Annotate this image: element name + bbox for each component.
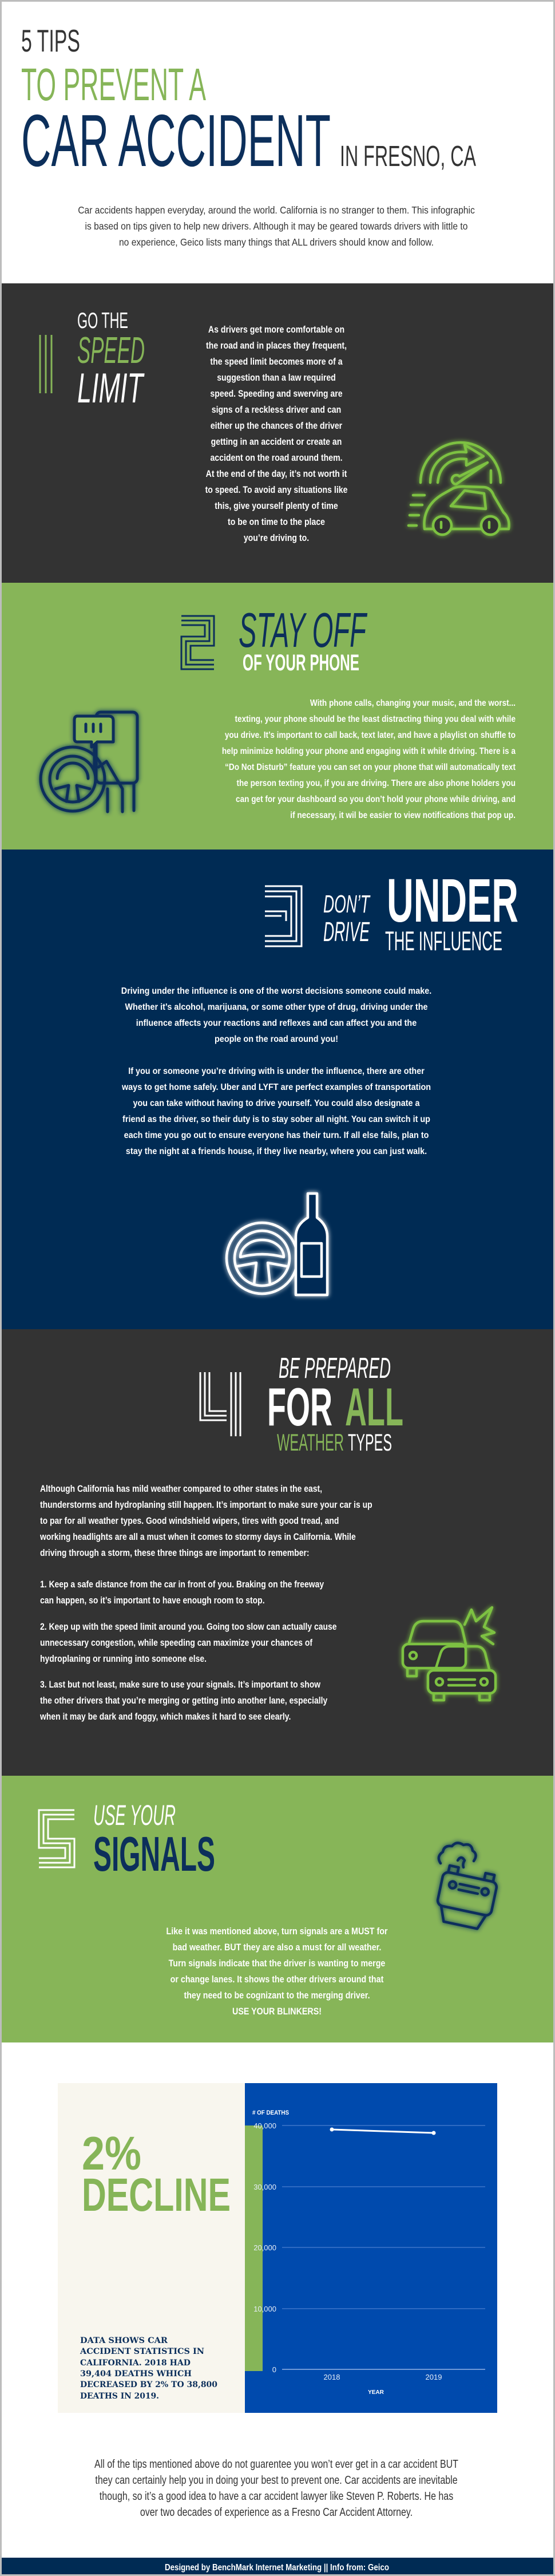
text: weather body: 2. Keep up with the speed limit around you. Going too slow can actually cause [40, 1622, 337, 1632]
text: weather body: when it may be dark and foggy, which makes it hard to see clearly. [39, 1712, 291, 1722]
panel: decline stat: 39,404 DEATHS WHICH [80, 2369, 192, 2379]
text: speed limit body: At the end of the day, it’s not worth it [206, 469, 347, 479]
text: phone body: can get for your dashboard so you don’t hold your phone while driving, and [236, 795, 516, 804]
header [21, 23, 476, 248]
text: signals body: USE YOUR BLINKERS! [232, 2006, 322, 2017]
text: weather body: Although California has mild weather compared to other states in the east, [40, 1484, 322, 1494]
text: weather body [39, 1484, 372, 1722]
heading: don't drive under the influence: DON’T [323, 890, 371, 918]
text: signals body: bad weather. BUT they are also a must for all weather. [173, 1942, 381, 1953]
text: influence body: people on the road around you! [215, 1034, 338, 1044]
text: weather body: unnecessary congestion, while speeding can maximize your chances of [40, 1638, 313, 1648]
footer: Designed by BenchMark Internet Marketing || Info from: Geico [165, 2563, 389, 2573]
text: signals body: Turn signals indicate that the driver is wanting to merge [169, 1958, 386, 1969]
text: influence body: ways to get home safely. Uber and LYFT are perfect examples of transportation [121, 1082, 431, 1092]
panel: tip 5 use your signals [0, 1776, 555, 2042]
text: weather body: 3. Last but not least, make sure to use your signals. It’s important to show [40, 1680, 321, 1690]
line chart: deaths by year: 2019 [426, 2373, 442, 2381]
text: influence body: you can take without having to drive yourself. You could also designate a [133, 1098, 420, 1108]
title: 5 tips: 5 TIPS [21, 23, 80, 58]
icon: number 3 [265, 886, 302, 946]
text: influence body: If you or someone you’re driving with is under the influence, there are other [128, 1066, 425, 1076]
text: speed limit body: this, give yourself plenty of time [215, 501, 338, 511]
text: weather body: 1. Keep a safe distance from the car in front of you. Braking on the freeway [40, 1579, 324, 1590]
panel: decline stat [58, 2083, 245, 2413]
heading: go the speed limit: GO THE [77, 309, 128, 333]
heading: don't drive under the influence: DRIVE [323, 917, 370, 947]
text: signals body: they need to be cognizant to the merging driver. [184, 1990, 370, 2001]
heading: use your signals: USE YOUR [93, 1799, 176, 1831]
line chart: deaths by year [245, 2083, 497, 2413]
text: phone body: “Do Not Disturb” feature you can set on your phone that will automatically text [225, 762, 516, 772]
title: to prevent a: TO PREVENT A [21, 59, 206, 110]
panel: tip 2 stay off your phone [0, 583, 555, 850]
footer [0, 2558, 555, 2576]
heading: be prepared for all weather types: BE PREPARED [279, 1352, 391, 1384]
heading: stay off of your phone [239, 603, 367, 675]
icon: phone and steering wheel [41, 712, 137, 812]
intro text [78, 204, 475, 248]
text: closing: they can certainly help you in doing your best to prevent one. Car accidents are inevitable [95, 2474, 458, 2486]
text: speed limit body: signs of a reckless driver and can [212, 405, 341, 415]
heading: use your signals [93, 1799, 215, 1882]
text: weather body: driving through a storm, these three things are important to remember: [40, 1548, 310, 1558]
text: speed limit body: either up the chances of the driver [211, 421, 342, 431]
text: weather body: to par for all weather types. Good windshield wipers, tires with good tread, and [40, 1516, 339, 1526]
intro text: Car accidents happen everyday, around the world. California is no stranger to them. This infographic [78, 204, 475, 216]
icon: number 1 bars [40, 335, 51, 393]
text: speed limit body: suggestion than a law required [217, 373, 336, 383]
icon: number 5 [39, 1810, 74, 1867]
text: influence body: Whether it’s alcohol, marijuana, or some other type of drug, driving under the [125, 1002, 428, 1012]
heading: stay off of your phone: STAY OFF [239, 603, 367, 658]
text: influence body: stay the night at a friends house, if they live nearby, where you can just walk. [126, 1146, 427, 1156]
line chart: deaths by year: 30,000 [253, 2183, 276, 2191]
title: in fresno ca: IN FRESNO, CA [340, 140, 476, 172]
chart: 2% decline [58, 2083, 497, 2413]
icon: steering wheel and bottle [227, 1194, 327, 1295]
heading: be prepared for all weather types: FOR [267, 1377, 332, 1437]
text: phone body [222, 698, 516, 820]
text: signals body: Like it was mentioned above, turn signals are a MUST for [166, 1926, 387, 1937]
panel: decline stat: DEATHS IN 2019. [80, 2392, 159, 2401]
icon: number 2 [181, 616, 214, 669]
heading: go the speed limit [77, 309, 145, 412]
icon: overturned car [434, 1843, 499, 1931]
panel: decline stat: 2% [82, 2127, 141, 2180]
panel: decline stat: DECREASED BY 2% TO 38,800 [80, 2380, 217, 2389]
intro text: is based on tips given to help new drivers. Although it may be geared towards drivers with little to [85, 220, 467, 232]
heading: go the speed limit: LIMIT [77, 365, 145, 412]
text: closing [94, 2458, 458, 2518]
line chart: deaths by year: YEAR [368, 2389, 384, 2396]
heading: go the speed limit: SPEED [77, 329, 145, 371]
text: speed limit body: to speed. To avoid any situations like [205, 485, 348, 495]
heading: don't drive under the influence [323, 866, 518, 956]
line chart: deaths by year: 0 [272, 2365, 276, 2374]
text: speed limit body: you’re driving to. [244, 533, 309, 543]
heading: stay off of your phone: OF YOUR PHONE [243, 650, 359, 675]
text: influence body: influence affects your reactions and reflexes and can affect you and the [136, 1018, 417, 1028]
text: speed limit body: to be on time to the place [228, 517, 325, 527]
text: influence body: Driving under the influence is one of the worst decisions someone could make. [121, 986, 431, 996]
panel: decline stat: DATA SHOWS CAR [80, 2336, 168, 2345]
text: speed limit body [205, 325, 348, 543]
heading: be prepared for all weather types: ALL [345, 1377, 403, 1437]
panel: tip 3 don't drive under the influence [0, 850, 555, 1329]
panel: decline stat: ACCIDENT STATISTICS IN [80, 2347, 204, 2356]
text: closing: All of the tips mentioned above do not guarentee you won’t ever get in a car accident BUT [94, 2458, 458, 2470]
text: signals body [166, 1926, 387, 2017]
text: weather body: hydroplaning or running into someone else. [40, 1654, 207, 1664]
text: speed limit body: speed. Speeding and swerving are [210, 389, 343, 399]
panel: tip 1 speed limit [0, 283, 555, 583]
icon: number 4 [200, 1372, 240, 1436]
heading: be prepared for all weather types [267, 1352, 403, 1456]
panel: tip 4 be prepared for all weather types [0, 1329, 555, 1776]
panel: decline stat: CALIFORNIA. 2018 HAD [80, 2358, 191, 2368]
text: weather body: working headlights are all a must when it comes to stormy days in California. While [39, 1532, 356, 1542]
heading: be prepared for all weather types: WEATHER [277, 1429, 344, 1456]
text: signals body: or change lanes. It shows the other drivers around that [171, 1974, 384, 1985]
text: speed limit body: As drivers get more comfortable on [208, 325, 344, 335]
heading: be prepared for all weather types: TYPES [348, 1429, 392, 1456]
text: weather body: the other drivers that you’re merging or getting into another lane, especially [40, 1696, 328, 1706]
line chart: deaths by year: 10,000 [253, 2305, 276, 2313]
text: phone body: With phone calls, changing your music, and the worst... [310, 698, 516, 708]
text: speed limit body: the road and in places they frequent, [206, 341, 347, 351]
panel: decline stat: DECLINE [82, 2169, 231, 2221]
text: phone body: the person texting you, if you are driving. There are also phone holders you [236, 779, 516, 788]
line chart: deaths by year: 2018 [324, 2373, 340, 2381]
text: weather body: can happen, so it’s important to have enough room to stop. [40, 1595, 265, 1606]
text: phone body: texting, your phone should be the least distracting thing you deal with while [235, 714, 516, 724]
line chart: deaths by year: 20,000 [253, 2243, 276, 2252]
text: speed limit body: getting in an accident or create an [211, 437, 342, 447]
text: speed limit body: accident on the road around them. [210, 453, 343, 463]
text: closing: though, so it’s a good idea to have a car accident lawyer like Steven P. Roberts. He has [100, 2490, 453, 2502]
line chart: deaths by year: # OF DEATHS [252, 2109, 289, 2116]
text: phone body: you drive. It’s important to call back, text later, and have a playlist on shuffle to [225, 730, 516, 740]
icon: two cars crash [403, 1607, 495, 1700]
icon: speeding car [409, 442, 509, 535]
text: influence body: each time you go out to ensure everyone has their turn. If all else fails, plan to [124, 1130, 429, 1140]
heading: use your signals: SIGNALS [93, 1827, 215, 1882]
text: influence body: friend as the driver, so their duty is to stay sober all night. You can switch it up [122, 1114, 430, 1124]
text: influence body [121, 986, 431, 1156]
intro text: no experience, Geico lists many things that ALL drivers should know and follow. [119, 236, 434, 248]
text: phone body: if necessary, it wil be easier to view notifications that pop up. [290, 811, 516, 820]
text: weather body: thunderstorms and hydroplaning still happen. It’s important to make sure your car is up [40, 1500, 372, 1510]
text: closing: over two decades of experience as a Fresno Car Accident Attorney. [140, 2506, 413, 2518]
line chart: deaths by year: 40,000 [253, 2121, 276, 2130]
title: car accident: CAR ACCIDENT [21, 100, 331, 182]
text: phone body: help minimize holding your phone and engaging with it while driving. There is a [222, 746, 516, 756]
text: speed limit body: the speed limit becomes more of a [210, 357, 343, 367]
